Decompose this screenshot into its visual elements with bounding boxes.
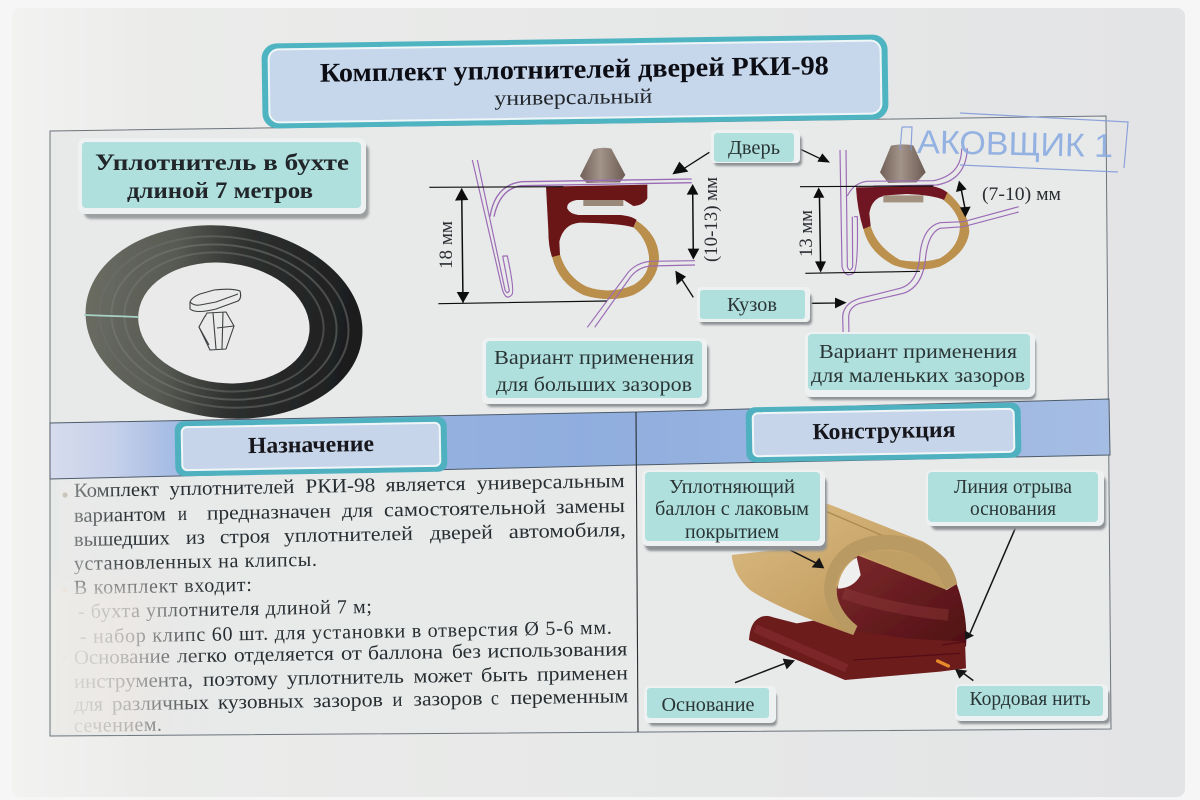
main frame xyxy=(50,116,1111,736)
purpose text block: инструмента, xyxy=(74,669,193,693)
label: balloon xyxy=(642,470,827,551)
label: large gaps: для больших зазоров xyxy=(496,374,692,396)
base strip xyxy=(749,616,966,680)
label: small gaps xyxy=(805,332,1036,400)
purpose text block: предназначен xyxy=(207,500,331,525)
tie on coil xyxy=(84,315,139,317)
purpose text block: является xyxy=(385,473,466,496)
inner wine surface xyxy=(837,555,966,647)
label: balloon: покрытием xyxy=(685,521,779,543)
coil photo with clip xyxy=(74,210,374,434)
coil of seal xyxy=(74,210,374,434)
body panel xyxy=(587,261,695,327)
dimension lines xyxy=(429,187,607,304)
purpose text block: применен xyxy=(537,662,628,686)
clip xyxy=(580,148,625,183)
subtitle: универсальный xyxy=(494,84,652,110)
pointer arrows xyxy=(735,527,1016,683)
dimension: (7-10) мм: (7-10) мм xyxy=(982,184,1061,205)
purpose text block: дверей xyxy=(430,521,493,545)
inner tan wall xyxy=(860,551,947,589)
stamp: АКОВЩИК 1 xyxy=(917,123,1114,164)
purpose text block: из xyxy=(186,527,205,549)
dimension lines xyxy=(800,186,933,273)
label: balloon: Уплотняющий xyxy=(669,476,795,498)
label: tear line: Линия отрыва xyxy=(954,476,1072,498)
blue section band xyxy=(50,399,1110,479)
label: cord thread: Кордовая нить xyxy=(970,688,1090,710)
dimension: (10-13) мм: (10-13) мм xyxy=(701,177,722,262)
purpose text block: - бухта уплотнителя длиной 7 м; xyxy=(78,596,372,623)
purpose text block: вышедших xyxy=(74,527,170,551)
purpose text block: переменным xyxy=(510,685,629,709)
label: large gaps: Вариант применения xyxy=(494,347,694,369)
purpose text block: различных xyxy=(112,692,209,715)
purpose text block: уплотнителей xyxy=(169,476,295,500)
purpose text block: установленных на клипсы. xyxy=(74,549,317,575)
icon: mounting clip xyxy=(190,289,241,350)
3D seal cutaway xyxy=(732,503,1016,683)
purpose text block: легко xyxy=(177,645,227,667)
purpose text block: баллона xyxy=(368,641,443,664)
clip xyxy=(880,144,926,183)
glare over text xyxy=(62,562,206,732)
purpose text block: отделяется xyxy=(234,643,334,666)
purpose text block: быть xyxy=(481,664,528,687)
label: cord thread xyxy=(955,684,1110,724)
purpose text block: с xyxy=(491,687,499,709)
purpose text block: замены xyxy=(556,495,625,518)
cord thread xyxy=(938,661,948,666)
purpose text block: для xyxy=(74,694,103,716)
purpose text block: поэтому xyxy=(203,668,278,691)
purpose text block: кузовных xyxy=(218,690,304,714)
purpose text block: для xyxy=(342,500,373,522)
callout: seal in coil: Уплотнитель в бухте xyxy=(95,150,349,175)
purpose text block: и xyxy=(178,503,187,525)
column divider xyxy=(636,412,638,732)
heading: Назначение: Назначение xyxy=(248,431,374,458)
title panel xyxy=(261,34,889,129)
purpose text block: вариантом xyxy=(74,503,166,527)
pointer arrows xyxy=(801,149,837,303)
balloon tube xyxy=(732,503,957,635)
heading: Конструкция xyxy=(746,403,1021,462)
dimension: 18 мм: 18 мм xyxy=(436,221,457,269)
label: Кузов: Кузов xyxy=(727,294,777,316)
label: balloon: баллон с лаковым xyxy=(655,498,809,520)
diagram: large gaps xyxy=(429,148,722,327)
purpose text block: универсальным xyxy=(476,470,625,495)
body panel xyxy=(843,207,1019,340)
purpose text block: Основание xyxy=(74,645,170,669)
title text: Комплект уплотнителей дверей РКИ-98 xyxy=(320,50,829,88)
purpose text block: и xyxy=(392,689,403,711)
callout: seal in coil: длиной 7 метров xyxy=(127,178,313,203)
purpose text block: уплотнителей xyxy=(284,523,413,547)
diagram: small gaps xyxy=(796,144,1061,340)
heading: Конструкция: Конструкция xyxy=(812,417,956,444)
purpose text block: строя xyxy=(220,525,270,548)
purpose text block: зазоров xyxy=(313,689,383,712)
purpose text block: - набор клипс 60 шт. для установки в отверстия Ø 5-6 мм. xyxy=(80,617,612,648)
seal profile xyxy=(552,221,659,299)
label: base xyxy=(644,686,777,726)
purpose text block: самостоятельной xyxy=(384,496,546,521)
purpose text block: использования xyxy=(487,638,628,663)
label: Дверь xyxy=(711,130,802,166)
label: base: Основание xyxy=(662,694,755,716)
label: small gaps: для маленьких зазоров xyxy=(811,365,1025,387)
purpose text block: может xyxy=(413,665,473,688)
purpose text block: В комплект входит: xyxy=(74,574,252,599)
label: Кузов xyxy=(697,287,812,325)
bullets xyxy=(62,492,68,498)
stamp xyxy=(900,113,1128,172)
seal profile xyxy=(863,192,969,270)
heading: Назначение xyxy=(175,417,447,476)
purpose text block: РКИ-98 xyxy=(305,475,376,498)
purpose text block: от xyxy=(341,642,362,665)
purpose text block: без xyxy=(452,641,481,663)
pointer arrows xyxy=(680,152,709,297)
door panel xyxy=(490,179,692,217)
label: large gaps xyxy=(482,338,709,407)
callout: seal in coil xyxy=(78,138,369,219)
purpose text block: уплотнитель xyxy=(287,666,404,690)
purpose text block: Комплект xyxy=(74,478,159,502)
purpose text block: зазоров xyxy=(413,688,483,711)
label: tear line: основания xyxy=(970,498,1056,520)
purpose text block: сечением. xyxy=(74,714,162,737)
door panel xyxy=(840,150,857,275)
cutout xyxy=(838,557,861,589)
purpose text block: автомобиля, xyxy=(509,519,626,543)
label: small gaps: Вариант применения xyxy=(819,341,1017,363)
dimension: 13 мм: 13 мм xyxy=(796,210,817,257)
purpose text block xyxy=(52,470,629,737)
label: Дверь: Дверь xyxy=(728,137,780,159)
label: tear line xyxy=(926,470,1106,530)
ring face xyxy=(824,535,957,635)
